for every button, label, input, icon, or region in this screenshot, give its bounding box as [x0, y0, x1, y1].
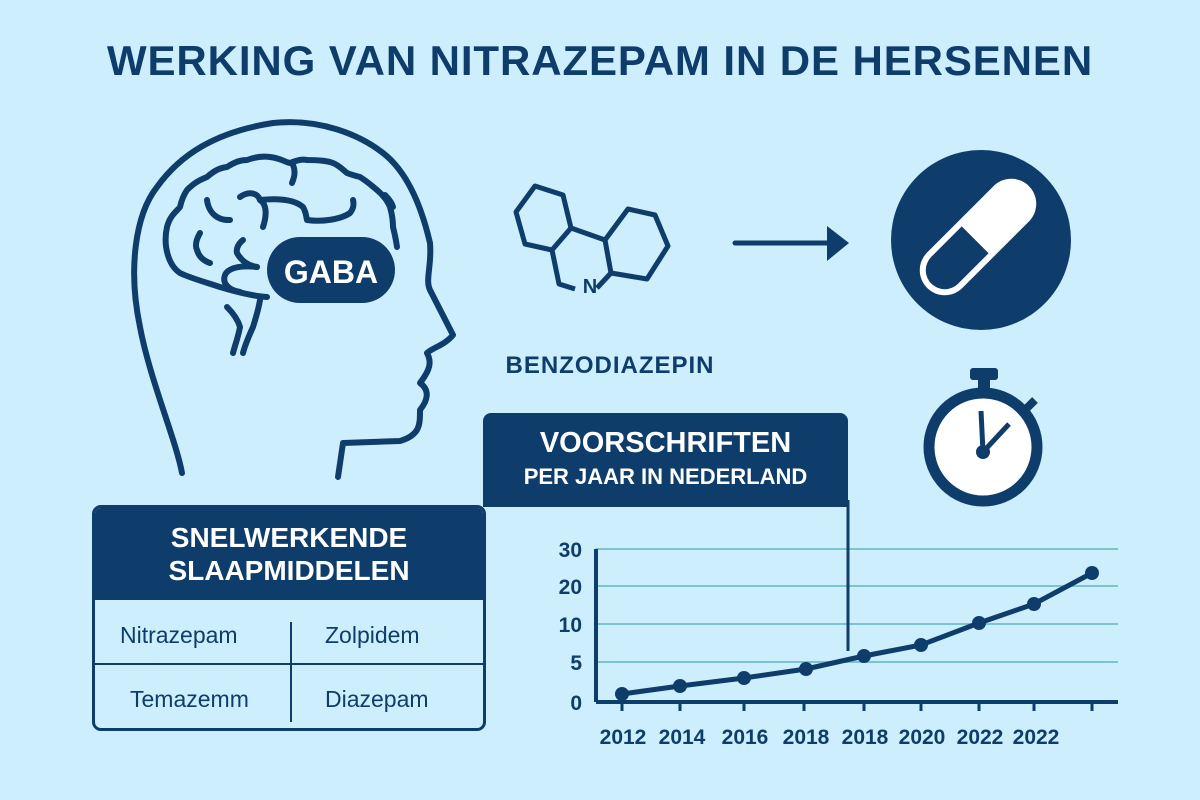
panel: chart header: VOORSCHRIFTEN: [540, 427, 791, 459]
arrow: [735, 226, 849, 261]
chart: [559, 539, 1118, 749]
chart: 2022: [1013, 726, 1059, 749]
icon: head with brain: [134, 122, 453, 477]
chart header callout line: [846, 500, 850, 651]
chart: 0: [570, 692, 582, 715]
panel: chart header: [483, 413, 848, 507]
chart: 2018: [783, 726, 830, 749]
chart: 10: [559, 614, 582, 637]
chart: 2014: [659, 726, 706, 749]
icon: stopwatch: [929, 368, 1037, 501]
panel: chart header: PER JAAR IN NEDERLAND: [524, 464, 807, 489]
heading: [95, 508, 483, 600]
table: Temazemm: [130, 686, 249, 712]
chart: 20: [559, 576, 582, 599]
icon: pill: [891, 150, 1071, 330]
icon: molecule: N: [583, 276, 597, 298]
chart: 2012: [600, 726, 646, 749]
heading: SNELWERKENDE: [171, 522, 407, 553]
chart: 2020: [899, 726, 945, 749]
label: GABA: GABA: [284, 254, 378, 290]
table: Nitrazepam: [120, 622, 238, 648]
title: WERKING VAN NITRAZEPAM IN DE HERSENEN: [107, 37, 1093, 84]
table: Zolpidem: [325, 622, 420, 648]
chart: 2016: [722, 726, 768, 749]
chart: 2022: [957, 726, 1003, 749]
chart: 5: [570, 652, 582, 675]
chart: 2018: [842, 726, 889, 749]
heading: SLAAPMIDDELEN: [168, 555, 410, 586]
label: GABA: [267, 237, 395, 303]
table: Diazepam: [325, 686, 429, 712]
icon: molecule: [516, 186, 668, 298]
chart: 30: [559, 539, 582, 562]
label: benzodiazepin: BENZODIAZEPIN: [505, 352, 715, 379]
panel: snelwerkende slaapmiddelen: [92, 505, 486, 731]
table: [95, 622, 483, 722]
